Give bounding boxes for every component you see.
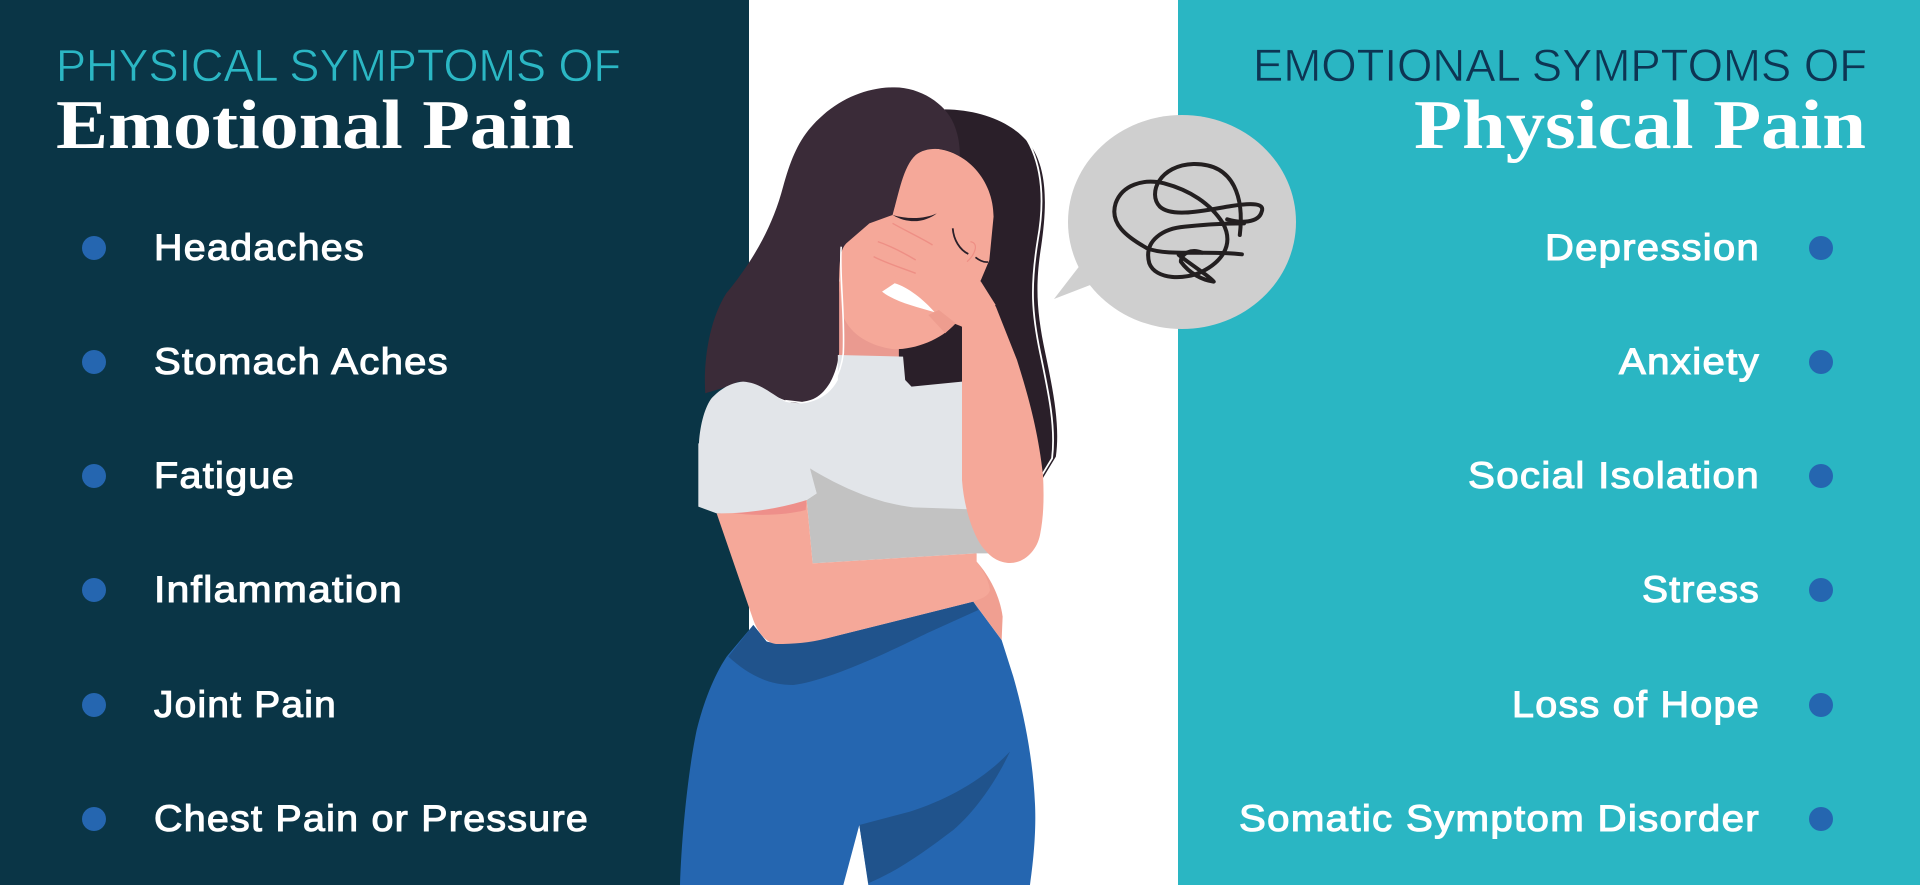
nose bbox=[967, 242, 975, 262]
item: depression: Depression bbox=[1545, 227, 1760, 268]
jeans bbox=[680, 602, 1035, 885]
hand bbox=[867, 218, 996, 327]
face bbox=[837, 148, 994, 360]
item: social isolation: Social Isolation bbox=[1468, 455, 1760, 496]
item: stress: Stress bbox=[1642, 569, 1760, 610]
cheek shadow bbox=[928, 310, 956, 333]
item: joint pain bbox=[82, 684, 337, 725]
item: chest pain or pressure: Chest Pain or Pressure bbox=[154, 798, 589, 839]
shirt: sleeve bbox=[698, 443, 972, 513]
item: headaches bbox=[82, 227, 365, 268]
finger lines bbox=[874, 223, 933, 273]
list: physical symptoms bbox=[82, 227, 589, 839]
item: loss of hope: Loss of Hope bbox=[1512, 684, 1760, 725]
item: anxiety bbox=[1619, 341, 1833, 382]
item: fatigue: Fatigue bbox=[154, 455, 295, 496]
item: fatigue bbox=[82, 455, 295, 496]
item: stress bbox=[1642, 569, 1833, 610]
heading: physical pain: Physical Pain bbox=[1414, 87, 1866, 164]
icon: scribble bbox=[1114, 164, 1262, 282]
hair: front bbox=[705, 87, 960, 403]
illustration: woman covering her face bbox=[680, 87, 1057, 885]
icon: speech bubble with tangled scribble bbox=[1054, 115, 1296, 329]
panel: emotional symptoms of physical pain bbox=[1178, 0, 1920, 885]
shirt: upper bbox=[699, 247, 975, 493]
item: somatic symptom disorder: Somatic Symptom Disorder bbox=[1239, 798, 1760, 839]
item: depression bbox=[1545, 227, 1833, 268]
heading: emotional pain: Emotional Pain bbox=[56, 87, 574, 164]
teeth bbox=[882, 283, 935, 312]
panel: physical symptoms of emotional pain bbox=[0, 0, 749, 885]
heading: emotional symptoms: EMOTIONAL SYMPTOMS OF bbox=[1253, 40, 1867, 91]
eyebrow bbox=[893, 213, 937, 221]
item: stomach aches: Stomach Aches bbox=[154, 341, 449, 382]
closed eye bbox=[953, 228, 968, 254]
item: joint pain: Joint Pain bbox=[154, 684, 337, 725]
list: emotional symptoms bbox=[1239, 227, 1833, 839]
hair: back bbox=[869, 109, 1057, 480]
heading: physical symptoms: PHYSICAL SYMPTOMS OF bbox=[56, 40, 621, 91]
raised arm bbox=[945, 278, 1044, 563]
item: anxiety: Anxiety bbox=[1619, 341, 1760, 382]
hand and facial features bbox=[867, 213, 996, 333]
shirt bbox=[807, 467, 993, 563]
item: inflammation: Inflammation bbox=[154, 569, 403, 610]
waist arm bbox=[717, 500, 1003, 644]
item: headaches: Headaches bbox=[154, 227, 365, 268]
